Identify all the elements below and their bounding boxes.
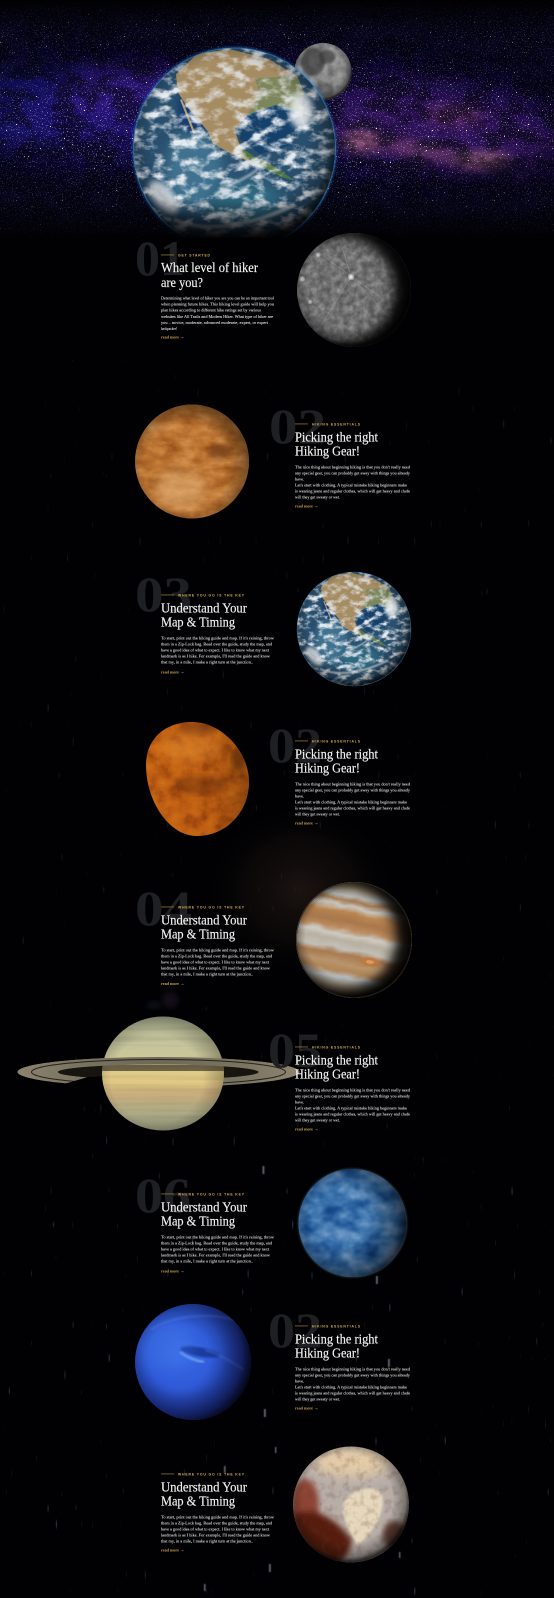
copy: plan hikes according to different hike ratings set by various xyxy=(161,308,261,313)
copy: is wearing jeans and regular clothes, which will get heavy and chafe xyxy=(295,806,410,812)
copy: Hiking Gear! xyxy=(295,444,360,458)
globe xyxy=(100,1015,226,1133)
block 8: picking the right hiking gear xyxy=(268,1302,411,1412)
block 9: understand your map: To start, print out the hiking guide and map. If it's raining, throw xyxy=(161,1514,275,1520)
copy: HIKING ESSENTIALS xyxy=(312,422,361,426)
copy: To start, print out the hiking guide and map. If it's raining, throw xyxy=(161,948,275,954)
copy xyxy=(295,1045,411,1132)
numeral 06: 06 xyxy=(135,1167,191,1223)
planet: uranus xyxy=(296,1167,409,1280)
copy: Map & Timing xyxy=(161,926,235,942)
copy: backpacker! xyxy=(161,326,177,331)
copy xyxy=(295,739,411,826)
copy xyxy=(295,1324,411,1412)
numeral 05: 05 xyxy=(268,1022,322,1078)
block 9: understand your map: landmark is as I hike. For example, I'll read the guide and know xyxy=(161,1532,271,1538)
copy: → xyxy=(314,504,318,510)
copy: read more xyxy=(161,1268,179,1274)
copy: have. xyxy=(295,1378,304,1384)
block 9: understand your map xyxy=(161,1472,275,1554)
copy: What level of hiker xyxy=(161,260,259,275)
block 9: understand your map: → xyxy=(180,1548,184,1554)
copy: → xyxy=(180,1268,184,1274)
copy: → xyxy=(314,820,318,826)
copy: that my, in a mile, I make a right turn at the junction.. xyxy=(161,660,253,666)
numeral 02: 02 xyxy=(268,717,322,773)
copy: is wearing jeans and regular clothes, which will get heavy and chafe xyxy=(295,1390,410,1396)
planet: neptune xyxy=(135,1304,251,1420)
copy: Let's start with clothing. A typical mistake hiking beginners make xyxy=(295,1384,407,1390)
moon xyxy=(294,43,352,100)
ring back xyxy=(17,1057,300,1092)
copy: WHERE YOU GO IS THE KEY xyxy=(178,1192,245,1196)
copy: The nice thing about beginning hiking is that you don't really need xyxy=(295,1366,411,1372)
copy xyxy=(295,422,411,510)
numeral 01: 01 xyxy=(135,230,185,286)
copy: HIKING ESSENTIALS xyxy=(312,1324,361,1328)
hero: milky way background xyxy=(0,0,554,240)
copy: Hiking Gear! xyxy=(295,1346,360,1360)
copy: you – novice, moderate, advanced moderate, expert, or expert xyxy=(161,320,269,326)
copy xyxy=(161,253,275,340)
copy: read more xyxy=(161,670,179,674)
planet: venus xyxy=(133,403,251,521)
copy: them in a Zip-Lock bag. Read over the guide, study the map, and xyxy=(161,1240,273,1246)
planet: saturn xyxy=(17,1015,300,1133)
copy: any special gear, you can probably get away with things you already xyxy=(295,470,411,476)
numeral 04: 04 xyxy=(135,880,192,936)
planet: pluto xyxy=(291,1445,411,1566)
copy: Understand Your xyxy=(161,912,248,928)
copy: read more xyxy=(161,334,179,340)
starfield streaks over the dark page xyxy=(0,360,554,1598)
copy: The nice thing about beginning hiking is that you don't really need xyxy=(295,782,411,786)
block 9: understand your map: Map & Timing xyxy=(161,1494,235,1508)
planet: jupiter xyxy=(296,882,412,998)
copy: read more xyxy=(295,820,313,826)
copy: any special gear, you can probably get away with things you already xyxy=(295,1372,411,1378)
copy: read more xyxy=(161,981,179,986)
planet: mercury xyxy=(297,233,411,347)
copy: Picking the right xyxy=(295,1332,378,1346)
block 3: understand your map xyxy=(135,566,275,676)
block 2: picking the right hiking gear xyxy=(269,398,411,510)
copy: GET STARTED xyxy=(178,253,211,257)
ring front xyxy=(18,1057,300,1071)
copy: them in a Zip-Lock bag. Read over the guide, study the map, and xyxy=(161,954,273,960)
copy: landmark is as I hike. For example, I'll read the guide and know xyxy=(161,1252,271,1258)
copy: → xyxy=(314,1406,318,1412)
copy: read more xyxy=(295,504,313,508)
copy: read more xyxy=(295,1126,313,1132)
copy: Hiking Gear! xyxy=(295,1066,360,1082)
copy: → xyxy=(180,334,184,340)
block 1: what level of hiker xyxy=(135,230,275,340)
copy: will they get sweaty or wet. xyxy=(295,1118,340,1122)
copy xyxy=(161,1192,275,1274)
copy: Picking the right xyxy=(295,430,378,444)
hero earth xyxy=(132,46,337,252)
block 7: understand your map xyxy=(135,1167,275,1274)
copy: Hiking Gear! xyxy=(295,760,360,776)
copy: HIKING ESSENTIALS xyxy=(312,739,361,743)
copy: landmark is as I hike. For example, I'll read the guide and know xyxy=(161,966,271,972)
copy: any special gear, you can probably get away with things you already xyxy=(295,1094,411,1100)
copy: Picking the right xyxy=(295,1052,378,1068)
block 5: understand your map xyxy=(135,880,275,987)
block 9: understand your map: that my, in a mile, I make a right turn at the junction.. xyxy=(161,1538,253,1544)
block 9: understand your map: them in a Zip-Lock bag. Read over the guide, study the map, and xyxy=(161,1520,273,1526)
copy: → xyxy=(314,1126,318,1132)
copy: have. xyxy=(295,476,304,482)
copy: Map & Timing xyxy=(161,614,235,630)
copy: → xyxy=(180,981,184,987)
copy: To start, print out the hiking guide and map. If it's raining, throw xyxy=(161,636,275,642)
copy: will they get sweaty or wet. xyxy=(295,1396,340,1402)
copy: have. xyxy=(295,1100,304,1104)
numeral 03: 03 xyxy=(135,566,192,622)
copy: when planning future hikes. This hiking level guide will help you xyxy=(161,302,275,307)
block 6: picking the right hiking gear xyxy=(268,1022,411,1132)
copy: will they get sweaty or wet. xyxy=(295,494,340,500)
copy: will they get sweaty or wet. xyxy=(295,812,340,816)
numeral 02: 02 xyxy=(269,398,326,454)
copy: are you? xyxy=(161,275,203,290)
numeral 02: 02 xyxy=(268,1302,322,1358)
copy: Let's start with clothing. A typical mistake hiking beginners make xyxy=(295,1106,407,1110)
copy xyxy=(161,905,275,987)
copy: WHERE YOU GO IS THE KEY xyxy=(178,593,245,597)
copy: that my, in a mile, I make a right turn at the junction.. xyxy=(161,1258,253,1264)
copy: read more xyxy=(295,1406,313,1410)
planet: earth xyxy=(297,572,411,686)
copy: have a good idea of what to expect. I like to know what my next xyxy=(161,960,270,964)
block 4: picking the right hiking gear xyxy=(268,717,411,826)
copy: Picking the right xyxy=(295,746,378,762)
copy xyxy=(161,593,275,676)
copy: To start, print out the hiking guide and map. If it's raining, throw xyxy=(161,1234,275,1240)
block 9: understand your map: Understand Your xyxy=(161,1480,248,1494)
copy: HIKING ESSENTIALS xyxy=(312,1045,361,1049)
copy: websites like All Trails and Modern Hiker. What type of hiker are xyxy=(161,314,273,319)
block 9: understand your map: WHERE YOU GO IS THE KEY xyxy=(178,1472,245,1476)
copy: Map & Timing xyxy=(161,1214,235,1228)
planet: mars xyxy=(144,720,252,838)
copy: Understand Your xyxy=(161,1200,248,1214)
copy: have. xyxy=(295,794,304,798)
copy: them in a Zip-Lock bag. Read over the guide, study the map, and xyxy=(161,642,273,648)
copy: Determining what level of hiker you are you can be an important tool xyxy=(161,296,275,300)
copy: Let's start with clothing. A typical mistake hiking beginners make xyxy=(295,800,407,804)
block 9: understand your map: read more xyxy=(161,1548,179,1552)
copy: The nice thing about beginning hiking is that you don't really need xyxy=(295,464,411,470)
copy: The nice thing about beginning hiking is that you don't really need xyxy=(295,1088,411,1092)
block 9: understand your map: have a good idea of what to expect. I like to know what my next xyxy=(161,1526,270,1532)
copy: that my, in a mile, I make a right turn at the junction.. xyxy=(161,972,253,978)
copy: Let's start with clothing. A typical mistake hiking beginners make xyxy=(295,482,407,488)
copy: Understand Your xyxy=(161,600,248,616)
copy: have a good idea of what to expect. I like to know what my next xyxy=(161,1246,270,1252)
copy: any special gear, you can probably get away with things you already xyxy=(295,788,411,794)
hero bottom fade xyxy=(0,198,554,258)
copy: landmark is as I hike. For example, I'll read the guide and know xyxy=(161,654,271,660)
copy: is wearing jeans and regular clothes, which will get heavy and chafe xyxy=(295,1112,410,1118)
copy: WHERE YOU GO IS THE KEY xyxy=(178,905,245,909)
copy: is wearing jeans and regular clothes, which will get heavy and chafe xyxy=(295,488,410,494)
copy: → xyxy=(180,670,184,676)
copy: have a good idea of what to expect. I like to know what my next xyxy=(161,648,270,652)
